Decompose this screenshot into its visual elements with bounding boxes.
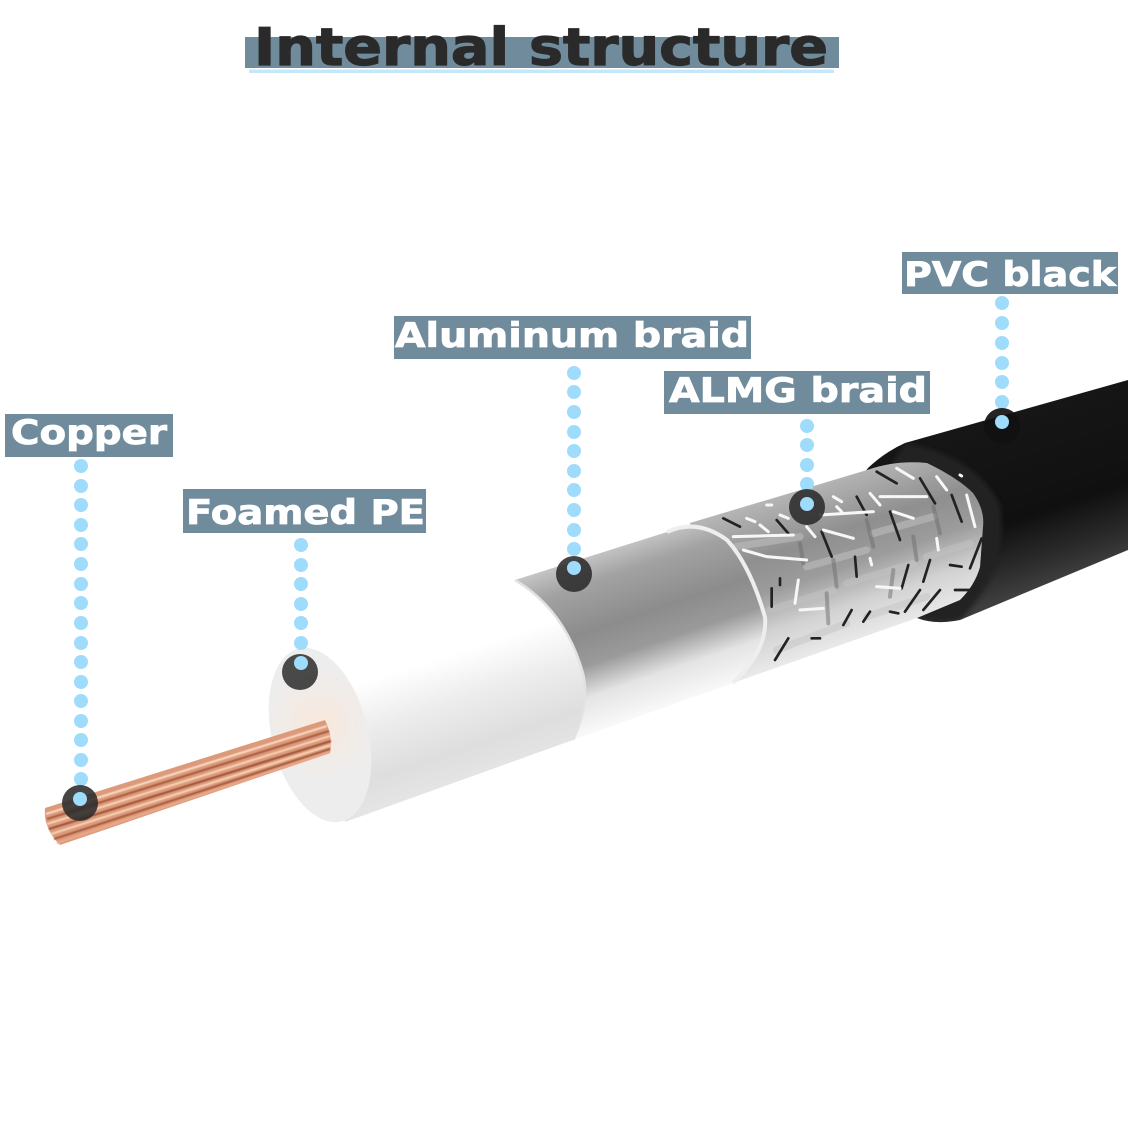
section: PVC black jacket xyxy=(800,380,1128,622)
label: copper: Copper xyxy=(11,413,167,453)
marker: copper xyxy=(62,785,98,821)
title band xyxy=(245,37,839,68)
copper conductor xyxy=(45,720,331,845)
braid rim xyxy=(667,527,765,683)
section: jacket collar xyxy=(894,442,1002,622)
section: ALMG braid xyxy=(690,462,983,683)
foil rim xyxy=(515,580,585,740)
marker: aluminum braid xyxy=(556,556,592,592)
dotted leader: ALMG braid xyxy=(800,419,814,491)
callout: PVC black xyxy=(902,252,1118,444)
title xyxy=(245,18,839,78)
section: aluminum braid xyxy=(515,528,765,740)
dotted leader: PVC black xyxy=(995,296,1009,409)
dotted leader: copper xyxy=(74,459,88,786)
callout: copper xyxy=(5,413,173,821)
callout: aluminum braid xyxy=(394,316,751,592)
title text: Internal structure xyxy=(254,18,828,78)
dotted leader: aluminum braid xyxy=(567,366,581,556)
marker: ALMG braid xyxy=(789,489,825,525)
marker: foamed PE xyxy=(282,654,318,690)
foamed PE end face xyxy=(252,637,388,833)
marker: PVC black xyxy=(984,408,1020,444)
coaxial cable xyxy=(45,380,1128,845)
label: aluminum braid: Aluminum braid xyxy=(395,316,749,356)
label: foamed PE: Foamed PE xyxy=(186,493,425,533)
callout: ALMG braid xyxy=(664,371,930,525)
dotted leader: foamed PE xyxy=(294,538,308,650)
label: ALMG braid: ALMG braid xyxy=(669,371,927,411)
label: PVC black: PVC black xyxy=(904,255,1118,295)
title underline xyxy=(249,70,834,73)
section: foamed PE body xyxy=(300,580,585,822)
callout: foamed PE xyxy=(183,489,426,690)
